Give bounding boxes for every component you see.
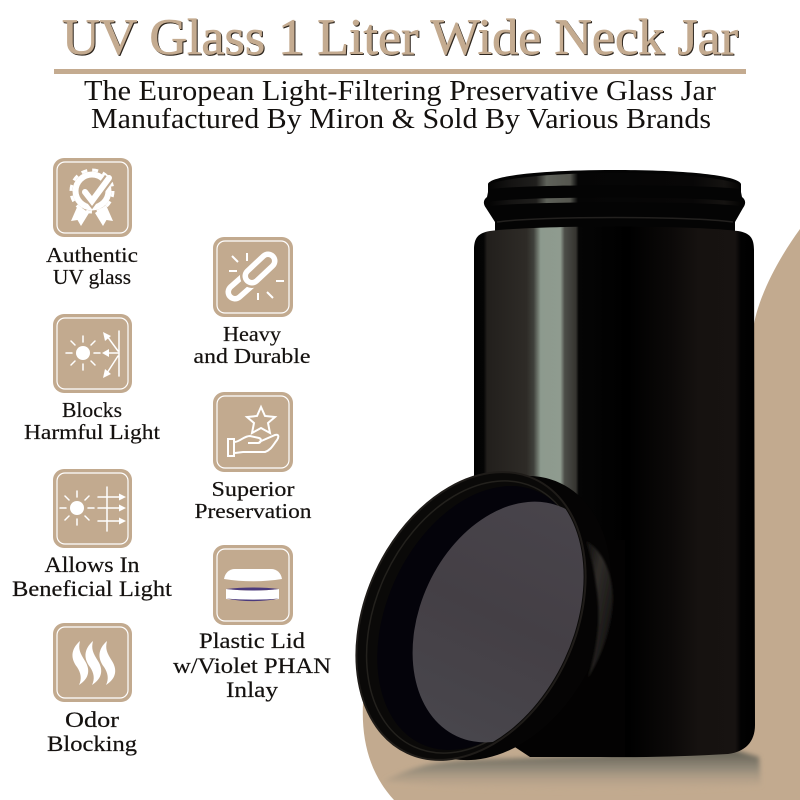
icon: hand holding star	[213, 392, 293, 472]
icon: lid and inlay	[213, 545, 293, 625]
icon: sun with reflected arrows	[53, 314, 132, 393]
feature: odor blocking	[47, 623, 137, 756]
label: heavy and durable: and Durable	[194, 344, 310, 368]
subtitle	[84, 76, 717, 135]
feature: blocks harmful light	[24, 314, 160, 444]
label: authentic UV glass: UV glass	[53, 265, 131, 289]
title: UV Glass 1 Liter Wide Neck Jar	[62, 10, 738, 66]
lid threads	[325, 446, 623, 788]
jar lower body shade	[474, 540, 625, 757]
label: superior preservation: Superior	[212, 477, 294, 501]
lid	[355, 472, 614, 761]
icon: sun with passing arrows	[53, 469, 132, 548]
feature: heavy and durable	[194, 237, 310, 368]
feature: authentic UV glass	[46, 158, 138, 289]
label: blocks harmful light: Blocks	[62, 398, 122, 422]
label: allows in beneficial light	[12, 552, 172, 601]
label: plastic lid with violet PHAN inlay: Inlay	[226, 677, 278, 702]
lid rim	[312, 435, 630, 797]
subtitle: Manufactured By Miron & Sold By Various Brands	[91, 104, 711, 135]
label: authentic UV glass: Authentic	[46, 243, 138, 267]
icon: odor waves	[53, 623, 132, 702]
jar neck threads	[484, 170, 745, 234]
background tan shape	[363, 229, 800, 800]
label: superior preservation	[194, 477, 312, 523]
label: blocks harmful light	[24, 398, 160, 444]
subtitle: The European Light-Filtering Preservative Glass Jar	[84, 76, 717, 107]
lid inner	[337, 453, 623, 783]
label: superior preservation: Preservation	[194, 499, 312, 523]
title rule	[54, 69, 746, 74]
lid side wall	[339, 439, 655, 797]
jar shadow	[384, 750, 761, 791]
label: blocks harmful light: Harmful Light	[24, 420, 160, 444]
lid violet inlay disc	[412, 502, 584, 742]
jar body	[474, 226, 755, 757]
jar	[474, 170, 755, 757]
label: odor blocking: Blocking	[47, 731, 137, 756]
label: allows in beneficial light: Beneficial Light	[12, 576, 172, 601]
label: odor blocking: Odor	[65, 707, 120, 732]
lid wall highlight	[585, 540, 613, 678]
label: plastic lid with violet PHAN inlay: Plastic Lid	[199, 628, 305, 653]
label: plastic lid with violet PHAN inlay: w/Violet PHAN	[173, 653, 331, 678]
label: odor blocking	[47, 707, 137, 756]
icon: chain link	[213, 237, 293, 317]
label: allows in beneficial light: Allows In	[44, 552, 140, 577]
label: authentic UV glass	[46, 243, 138, 289]
label: heavy and durable: Heavy	[223, 322, 282, 346]
feature: superior preservation	[194, 392, 312, 523]
icon: award badge	[53, 158, 132, 237]
feature: allows in beneficial light	[12, 469, 172, 601]
feature: plastic lid with violet inlay	[173, 545, 331, 702]
label: plastic lid with violet PHAN inlay	[173, 628, 331, 702]
label: heavy and durable	[194, 322, 310, 368]
